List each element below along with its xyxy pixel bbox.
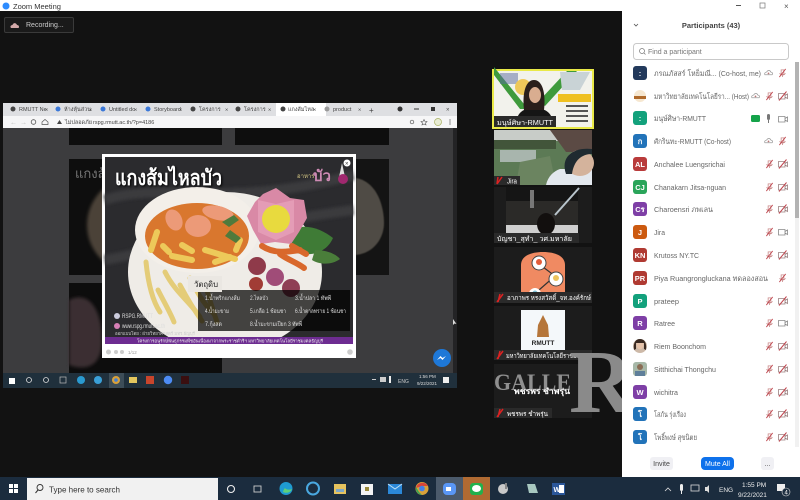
- participant row 12: Ratree: [654, 319, 675, 328]
- browser tab strip: ×: [268, 108, 271, 114]
- participant row 14: Sitthichai Thongchu: [654, 365, 716, 374]
- food photo: [128, 187, 340, 352]
- windows taskbar: [0, 477, 800, 500]
- participant row 16: โ: [637, 409, 643, 419]
- participant row 4: ศักรินทะ-RMUTT (Co-host): [654, 137, 731, 146]
- browser address bar: rspg.rmutt.ac.th/?p=4186: [93, 120, 154, 126]
- participant row 13: [633, 339, 788, 353]
- brand logo: อาหาร: [297, 173, 315, 180]
- browser tab strip: Storyboard: [154, 107, 181, 113]
- lemongrass sticks: [146, 262, 217, 322]
- ingredients panel: 1.น้ำพริกแกงส้ม: [205, 292, 240, 302]
- participant row 17: [633, 430, 788, 444]
- bamboo pieces: [151, 232, 240, 262]
- participant row 5: [633, 157, 788, 171]
- participant row 17: โ: [637, 432, 643, 442]
- participant row 9: Krutoss NY.TC: [654, 251, 700, 260]
- participant row 15: [633, 385, 788, 399]
- participant row 3: :: [639, 114, 641, 123]
- ingredients panel: 3.น้ำปลา 1 ทัพพี: [295, 292, 331, 302]
- participant row 5: AL: [635, 160, 645, 169]
- contact info: www.rspg.rmutt.ac.th: [121, 324, 165, 330]
- participant tile: RMUTT logo: [494, 306, 592, 360]
- browser tab strip: ×: [225, 108, 228, 114]
- ingredients panel: 6.น้ำตาลทราย 1 ช้อนชา: [295, 305, 346, 315]
- title bar: [0, 0, 622, 11]
- browser tab strip: ×: [313, 108, 316, 114]
- participant row 17: โพธิ์พงษ์ สุขนิตย: [654, 432, 697, 442]
- mute all button: Mute All: [705, 461, 730, 468]
- browser tab strip: ×: [45, 108, 48, 114]
- browser tab strip: ×: [358, 108, 361, 114]
- participant row 13: Riem Boonchom: [654, 342, 706, 351]
- ingredients panel: 7.กุ้งสด: [205, 321, 222, 328]
- participant tile: RMUTT logo: มหาวิทยาลัยเทคโนโลยีราชมงค...: [506, 352, 588, 360]
- participant tile: name only: พชรพร ชำพรุ่น: [507, 410, 549, 418]
- participant row 16: [633, 407, 788, 421]
- participant tile: network icon: [494, 247, 592, 303]
- participant tile: network icon: อาภาพร หรงสวัสดิ์_จท.องค์รักษ์: [507, 293, 592, 302]
- participant row 10: [633, 271, 786, 285]
- inner windows taskbar: 9/22/2021: [417, 381, 438, 386]
- browser page background: [3, 128, 457, 373]
- shared browser window: [3, 103, 457, 388]
- participant thumbnails: [492, 67, 594, 418]
- participant tile: name only: [494, 364, 592, 418]
- system tray: ENG: [719, 487, 733, 494]
- ingredients panel: [188, 276, 350, 331]
- participant row 14: [633, 362, 788, 376]
- participant row 6: Chanakarn Jitsa-nguan: [654, 183, 726, 192]
- participant row 10: PR: [635, 274, 646, 283]
- participant row 7: Cร: [635, 205, 646, 214]
- start button: [9, 484, 18, 493]
- brand logo: [297, 163, 348, 185]
- browser tab strip: ห้างหุ้นส่วน: [64, 106, 91, 113]
- popup footer controls: [106, 349, 353, 355]
- third video thumbnail: บัญชา_สุทำ_ วศ.มหาลัย: [497, 235, 572, 243]
- recording indicator: [4, 18, 74, 32]
- gallery watermark: [495, 353, 622, 412]
- popup title: แกงส้มไหลบัว: [115, 165, 222, 190]
- browser tab strip: ×: [134, 108, 137, 114]
- recipe popup: [102, 154, 356, 358]
- participant row 11: prateep: [654, 297, 679, 306]
- participant row 7: Charoensri ภพเลน: [654, 205, 713, 214]
- browser address bar: ←: [10, 120, 17, 126]
- jira video thumbnail: Jira: [507, 178, 517, 186]
- participant row 1: :: [639, 69, 641, 78]
- recording indicator: Recording...: [26, 22, 64, 29]
- participant tile: RMUTT logo: RMUTT: [532, 340, 554, 347]
- participant row 4: ก: [638, 137, 643, 146]
- browser tab strip: ×: [179, 108, 182, 114]
- purple caption strip: [105, 337, 353, 344]
- browser tab strip: product: [333, 107, 352, 113]
- participant row 3: [633, 111, 788, 125]
- browser address bar: →: [20, 120, 27, 126]
- browser tab strip: โครงการ: [244, 105, 266, 113]
- blurred background cards: แกงส้ม: [75, 166, 114, 181]
- lotus flower: [247, 188, 307, 244]
- participant row 8: J: [638, 228, 642, 237]
- participant row 6: [633, 180, 788, 194]
- participant row 8: [633, 225, 788, 239]
- contact info: ออกแบบโดย : ฝ่ายวิทยาศาสตร์ มทร.ธัญบุรี: [115, 330, 196, 337]
- inner windows taskbar: [3, 373, 457, 388]
- participant row 15: wichitra: [653, 388, 679, 397]
- ingredients panel: วัตถุดิบ: [194, 280, 218, 289]
- participant row 11: P: [637, 297, 643, 306]
- participant row 7: [633, 202, 788, 216]
- jira video thumbnail: [494, 130, 594, 186]
- window controls: ×: [784, 2, 789, 11]
- speaker video thumbnail: มนุษ์ศิษา-RMUTT: [497, 119, 554, 127]
- system tray: 4: [784, 490, 788, 496]
- popup footer controls: 1/12: [128, 350, 137, 355]
- participant row 11: [633, 294, 788, 308]
- participant row 4: [633, 134, 786, 148]
- browser tab strip: แกงส้มไหล: [288, 106, 314, 113]
- window controls: [736, 2, 789, 11]
- invite button: Invite: [653, 461, 670, 468]
- shrimp: [165, 205, 234, 237]
- participant row 8: Jira: [654, 228, 666, 237]
- browser tab strip: RMUTT Ne: [19, 107, 47, 113]
- bowl: [135, 187, 227, 240]
- inner windows taskbar: ENG: [398, 379, 409, 385]
- participant row 12: R: [637, 319, 643, 328]
- invite button: [650, 457, 673, 470]
- browser address bar: [3, 116, 457, 128]
- brand logo: บัว: [313, 168, 331, 185]
- ingredients panel: 4.น้ำมะขาม: [205, 305, 229, 315]
- more button: ...: [765, 461, 770, 468]
- third video thumbnail: [494, 187, 592, 243]
- browser tab strip: ×: [446, 108, 450, 114]
- plate: [128, 192, 322, 352]
- participant row 2: [634, 90, 788, 102]
- task icons: [228, 477, 565, 500]
- browser tab strip: [3, 103, 457, 116]
- contact info: [114, 313, 196, 337]
- browser address bar: ไม่ปลอดภัย: [64, 119, 92, 126]
- thumbnail name over watermark: พชรพร ชำพรุ่น: [514, 387, 571, 397]
- panel heading: [634, 21, 741, 30]
- mute all button: [701, 457, 734, 470]
- participant row 5: Anchalee Luengsrichai: [654, 160, 725, 169]
- participant row 10: Piya Ruangrongluckana ทดลองสอน: [654, 274, 768, 283]
- mouse cursor: [453, 319, 456, 325]
- participant row 9: [633, 248, 788, 262]
- inner windows taskbar: 1:56 PM: [419, 374, 436, 379]
- search box: Type here to search: [49, 484, 120, 494]
- participant row 12: [633, 316, 788, 330]
- ingredients panel: 5.เกลือ 1 ช้อนชา: [250, 307, 286, 315]
- system tray: [665, 482, 790, 499]
- system tray: 9/22/2021: [738, 492, 767, 499]
- close button: [344, 160, 350, 168]
- ingredients panel: 8.น้ำมะขามเปียก 3 ทัพพี: [250, 318, 302, 328]
- ingredients panel: 2.ไหลบัว: [250, 294, 268, 302]
- more button: [761, 457, 774, 470]
- shallots and chili: [248, 246, 306, 297]
- participant row 2: มหาวิทยาลัยเทคโนโลยีรา... (Host): [654, 92, 749, 101]
- browser tab strip: โครงการ: [199, 105, 221, 113]
- title bar: Zoom Meeting: [13, 2, 61, 11]
- search box: [27, 478, 218, 500]
- gallery watermark: R: [569, 333, 635, 432]
- gallery watermark: GALLE: [494, 370, 571, 395]
- panel heading: Participants (43): [682, 21, 741, 30]
- participant row 15: W: [636, 388, 644, 397]
- speaker video thumbnail: [492, 67, 594, 129]
- search box: Find a participant: [648, 49, 702, 56]
- browser tab strip: Untitled do: [109, 107, 135, 113]
- participant row 1: [633, 66, 786, 80]
- system tray: 1:55 PM: [742, 482, 766, 489]
- green leaves: [291, 227, 333, 254]
- browser tab strip: ×: [89, 108, 92, 114]
- participant row 3: มนุษ์ศิษา-RMUTT: [654, 114, 706, 123]
- browser tab strip: +: [369, 106, 374, 115]
- participant row 9: KN: [635, 251, 645, 260]
- participant row 6: CJ: [635, 183, 645, 192]
- close button: ×: [345, 162, 349, 168]
- task icons: W: [554, 487, 560, 494]
- purple caption strip: โครงการอนุรักษ์พันธุกรรมพืชอันเนื่องมาจากพระราชดำริฯ มหาวิทยาลัยเทคโนโลยีราชมงคลธัญบุรี: [137, 338, 324, 344]
- participants panel: [622, 0, 800, 477]
- participant row 16: โสภัน รุ่งเรือง: [654, 410, 686, 419]
- participant row 1: ภรณภัสสร์ โหย็มณี... (Co-host, me): [654, 68, 761, 78]
- messenger button: [433, 349, 451, 367]
- blurred background cards: [69, 128, 389, 373]
- scrollbar: [795, 62, 799, 447]
- search box: [634, 44, 788, 60]
- contact info: RSPG.RMUTT: [122, 314, 153, 320]
